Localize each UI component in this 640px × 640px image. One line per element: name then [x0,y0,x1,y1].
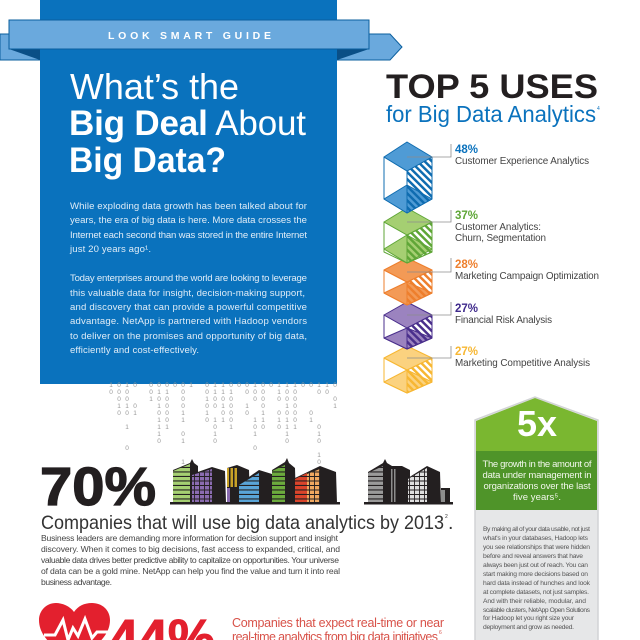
intro text: to deliver on the promises and opportunity of big data, [70,331,307,342]
intro text: and discovery that can provide a powerful competitive [70,302,307,313]
paragraph: business leaders: of data can be a gold mine. NetApp can help you find the value and turn it into real [41,566,340,576]
title [69,66,306,180]
headline: companies 2013: 2 [445,514,448,520]
ribbon: look smart guide [9,20,369,60]
icon: coloured buildings [170,458,340,504]
binary data rain: 0 0 1 0 [245,382,249,417]
binary data rain: 1 0 0 1 0 1 0 [317,382,321,466]
cube: orange [384,258,432,305]
binary data rain: 1 0 [325,382,329,396]
binary data rain: 0 [237,382,241,389]
binary data rain: 1 0 0 1 0 1 0 [125,382,129,452]
stat: 27% financial: Financial Risk Analysis [455,315,552,326]
callout text [482,459,592,503]
cube: yellow [384,346,432,393]
binary data rain: 1 0 0 0 0 0 1 [293,382,297,431]
icon: heart with pulse [39,603,112,640]
body text: you see relationships that were hidden [483,544,590,551]
heading: top 5 uses: TOP 5 USES [386,68,598,106]
binary data rain: 0 1 0 0 0 0 1 [165,382,169,431]
title: Big Data? [69,141,226,180]
cube: green [384,208,432,263]
intro text: efficiently and cost-effectively. [70,345,199,356]
binary data rain: 0 1 0 0 0 0 1 [229,382,233,431]
binary data rain: 1 0 0 1 0 1 1 1 0 [285,382,289,445]
title: What’s the [70,66,239,107]
heading: top 5 uses [386,68,600,127]
binary data rain: 1 0 [109,382,113,396]
binary data rain: 0 1 0 1 0 1 1 1 0 [157,382,161,445]
intro text: Today enterprises around the world are looking to leverage [70,273,307,284]
icon: grey buildings [364,459,453,504]
paragraph: business leaders: business advantage. [41,577,112,587]
binary data rain: 0 0 1 [309,382,313,424]
body text: what's in your databases, Hadoop lets [482,535,589,542]
binary data rain: 0 [173,382,177,389]
stat: 48% [455,144,589,167]
stat: 27% financial: 27% [455,303,478,315]
binary data rain: 0 0 0 1 0 [117,382,121,417]
binary data rain: 0 0 1 [333,382,337,410]
callout text: five years⁵. [513,492,561,503]
heading: top 5 uses: for Big Data Analytics [386,101,596,127]
intro text: this valuable data for insight, decision-making support, [70,288,305,299]
intro text: While exploding data growth has been talked about for [70,201,308,212]
binary data rain: 0 [301,382,305,389]
body text: always been just out of reach. You can [483,562,588,569]
callout text: The growth in the amount of [482,459,592,470]
body text [482,526,591,631]
headline: companies 2013: Companies that will use big data analytics by 2013 [41,512,444,534]
body text: By making all of your data usable, not just [483,526,590,533]
intro text [69,201,308,356]
paragraph: business leaders: Business leaders are demanding more information for decision support and insight [41,533,339,543]
panel: blue intro [40,0,337,384]
binary data rain: 0 0 1 [133,382,137,417]
body text: hard data instead of hunches and look [483,580,591,587]
heading: top 5 uses: 4 [597,106,600,112]
body text: deployment and grow as needed. [483,624,574,631]
cube: purple [384,302,432,349]
headline: companies 2013: . [448,512,453,534]
body text: for Hadoop let you right size your [483,615,575,622]
body text: And with their reliable, modular, and [483,598,586,605]
intro text: Internet each second than was stored in the entire Internet [70,230,307,241]
stat: 28%: Marketing Campaign Optimization [455,271,599,282]
body text: scalable clusters, NetApp Open Solutions [483,607,591,614]
stat: 27% competitive: 27% [455,346,478,358]
stat: 27% competitive [455,346,590,369]
text: real-time analytics: 6 [439,630,442,636]
stat: 37%: Churn, Segmentation [455,233,546,244]
binary data rain: 0 0 0 0 1 1 0 [261,382,265,431]
intro text: years, the era of big data is here. More data crosses the [70,215,307,226]
cube stack [384,142,432,393]
stat: 27% financial [455,303,552,326]
intro text: just 20 years ago¹. [69,244,151,255]
title: Big Deal About [69,104,306,143]
body text: before and reveal answers that have [483,553,583,560]
stat: 37%: Customer Analytics: [455,222,541,233]
binary data rain: 0 0 0 0 1 1 0 1 1 [181,382,185,466]
binary data rain: 0 0 1 0 1 0 [205,382,209,424]
stat: 28%: 28% [455,259,478,271]
stat: 70%: 70% [40,457,156,517]
callout text: data under management in [482,470,592,481]
paragraph: business leaders: valuable data drives better predictive ability to capitalize on opportunities. Your universe [41,555,339,565]
ribbon tails [0,34,402,60]
binary data rain [109,382,337,466]
body text: at complete datasets, not just samples. [483,589,589,596]
panel: 5x growth [475,397,598,640]
binary data rain: 0 [269,382,273,389]
binary data rain: 0 0 1 [149,382,153,403]
binary data rain: 1 0 0 1 0 1 0 [253,382,257,452]
intro text: advantage. NetApp is partnered with Hadoop vendors [70,316,307,327]
body text: start making more decisions based on [483,571,588,578]
binary data rain: 1 [189,382,193,389]
paragraph: business leaders: discovery. When it comes to big decisions, fast access to expanded, critical, and [41,544,340,554]
stat: 28% [455,259,599,282]
binary data rain: 1 1 0 0 1 0 [277,382,281,431]
paragraph: business leaders [41,533,340,587]
ribbon: look smart guide: LOOK SMART GUIDE [108,30,271,42]
stat: 37% [455,210,546,244]
callout text: organizations over the last [484,481,591,492]
stat: 27% competitive: Marketing Competitive Analysis [455,358,590,369]
cube: blue [384,142,432,213]
leader lines [407,144,451,358]
binary data rain: 1 1 0 1 0 1 [221,382,225,424]
stat: 48%: 48% [455,144,478,156]
stat: 48%: Customer Experience Analytics [455,156,589,167]
binary data rain: 1 1 0 0 1 0 1 0 [213,382,217,445]
text: real-time analytics: Companies that expect real-time or near [232,616,444,630]
stat: 37%: 37% [455,210,478,222]
text: real-time analytics [232,616,444,640]
big number: 5x [517,403,557,444]
